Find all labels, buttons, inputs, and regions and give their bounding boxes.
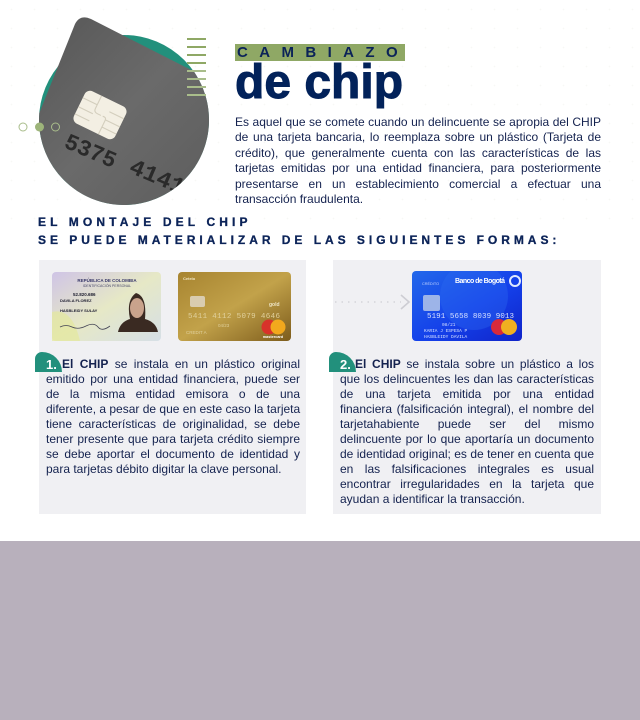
bottom band [0, 541, 640, 720]
intro text: tarjetas emitidas por una entidad financiera, para posteriormente [235, 161, 601, 175]
icon: identity card: HASBLEIDY SULAY [60, 308, 98, 313]
body text: que los delincuentes les dan las características [340, 372, 594, 386]
body text: se debe aportar el documento de identidad y [46, 447, 300, 461]
body text: ayudan a identificar la transacción. [340, 492, 525, 506]
icon: blue bank card: 08/21 [442, 322, 456, 328]
body text: delincuente por lo que aportaría un documento [340, 432, 594, 446]
body text: El CHIP se instala sobre un plástico a los [355, 357, 594, 371]
stripes [187, 39, 206, 95]
badge: number 2: 2. [340, 357, 351, 372]
body text: para tarjetas débito digitar la clave personal. [46, 462, 281, 476]
badge: number 1: 1. [46, 357, 57, 372]
body text: de identidad original; es de tener en cuenta que [340, 447, 594, 461]
title [235, 44, 405, 109]
title band: cambiazo: CAMBIAZO [237, 44, 405, 61]
intro text [235, 115, 602, 206]
icon: gold credit card: CREDIT A [186, 330, 207, 335]
body text: financiera (falsificación integral), el nombre del [340, 402, 594, 416]
panel: option 1 [39, 260, 306, 514]
icon: gold credit card: Cetelo [183, 276, 196, 281]
intro text: transacción fraudulenta. [235, 192, 363, 206]
embossed number [66, 134, 183, 190]
icon: gold credit card: 04/23 [218, 323, 230, 328]
badge: number 1 [35, 352, 62, 372]
title main: de chip: de chip [235, 56, 403, 109]
body text [46, 357, 300, 476]
icon: gold credit card: 5411 4112 5079 4646 [188, 313, 280, 321]
badge: number 2 [329, 352, 356, 372]
icon: identity card: REPÚBLICA DE COLOMBIA [77, 277, 137, 283]
body text: tiene características de originalidad, se debe [46, 417, 300, 431]
arrow: dotted [335, 294, 410, 310]
decorative dot background [0, 0, 640, 230]
icon: gold credit card: gold [269, 302, 280, 308]
dark card [39, 17, 209, 205]
body text: tarjetahabiente puede ser del mismo [340, 417, 594, 431]
section heading [38, 215, 560, 247]
body text: tener presente que para tarjeta crédito siempre [46, 432, 300, 446]
section heading: EL MONTAJE DEL CHIP [38, 215, 252, 229]
body text: emitido por una entidad financiera, puede ser [46, 372, 300, 386]
icon: identity card [52, 272, 161, 341]
icon: blue bank card: CRÉDITO [422, 281, 439, 286]
panel: option 2 [333, 260, 601, 514]
body text: diferente, a pesar de que en este caso la tarjeta [46, 402, 300, 416]
icon: identity card: DAVILA FLOREZ [60, 298, 92, 303]
intro text: Es aquel que se comete cuando un delincuente se apropia del CHIP [235, 115, 601, 129]
body text: El CHIP se instala en un plástico original [62, 357, 300, 371]
body text: de una tarjeta emitida por una entidad [340, 387, 594, 401]
icon: blue bank card [412, 271, 522, 341]
three dots [19, 122, 60, 132]
body text [340, 357, 594, 506]
icon: gold credit card [178, 272, 291, 341]
section heading: SE PUEDE MATERIALIZAR DE LAS SIGUIENTES FORMAS: [38, 233, 560, 247]
embossed number: 5375 [60, 130, 120, 175]
body text: de la misma entidad emisora o de una [46, 387, 300, 401]
icon: identity card: 52.820.686 [73, 292, 96, 297]
icon: blue bank card: KARIA J ESPESA P [424, 328, 468, 334]
body text: en las falsificaciones integrales es usual [340, 462, 594, 476]
intro text: de una tarjeta bancaria, lo reemplaza sobre un plástico (Tarjeta de [235, 130, 601, 144]
icon: blue bank card: Banco de Bogotá [455, 278, 505, 285]
embossed number: 4141 [125, 155, 189, 201]
body text: encontrar irregularidades en la tarjeta que [340, 477, 594, 491]
teal circle [39, 35, 209, 205]
illustration: chip card in circle [18, 17, 209, 205]
icon: identity card: IDENTIFICACIÓN PERSONAL [83, 283, 131, 288]
icon: blue bank card: HASBLEIDY DAVILA [424, 334, 468, 340]
chip [73, 90, 127, 140]
intro text: crédito), que generalmente cuenta con las características de las [235, 146, 601, 160]
icon: gold credit card: mastercard [263, 335, 284, 339]
icon: blue bank card: 5191 5658 8039 9013 [427, 313, 514, 321]
intro text: presentarse en un establecimiento comercial a efectuar una [235, 177, 601, 191]
